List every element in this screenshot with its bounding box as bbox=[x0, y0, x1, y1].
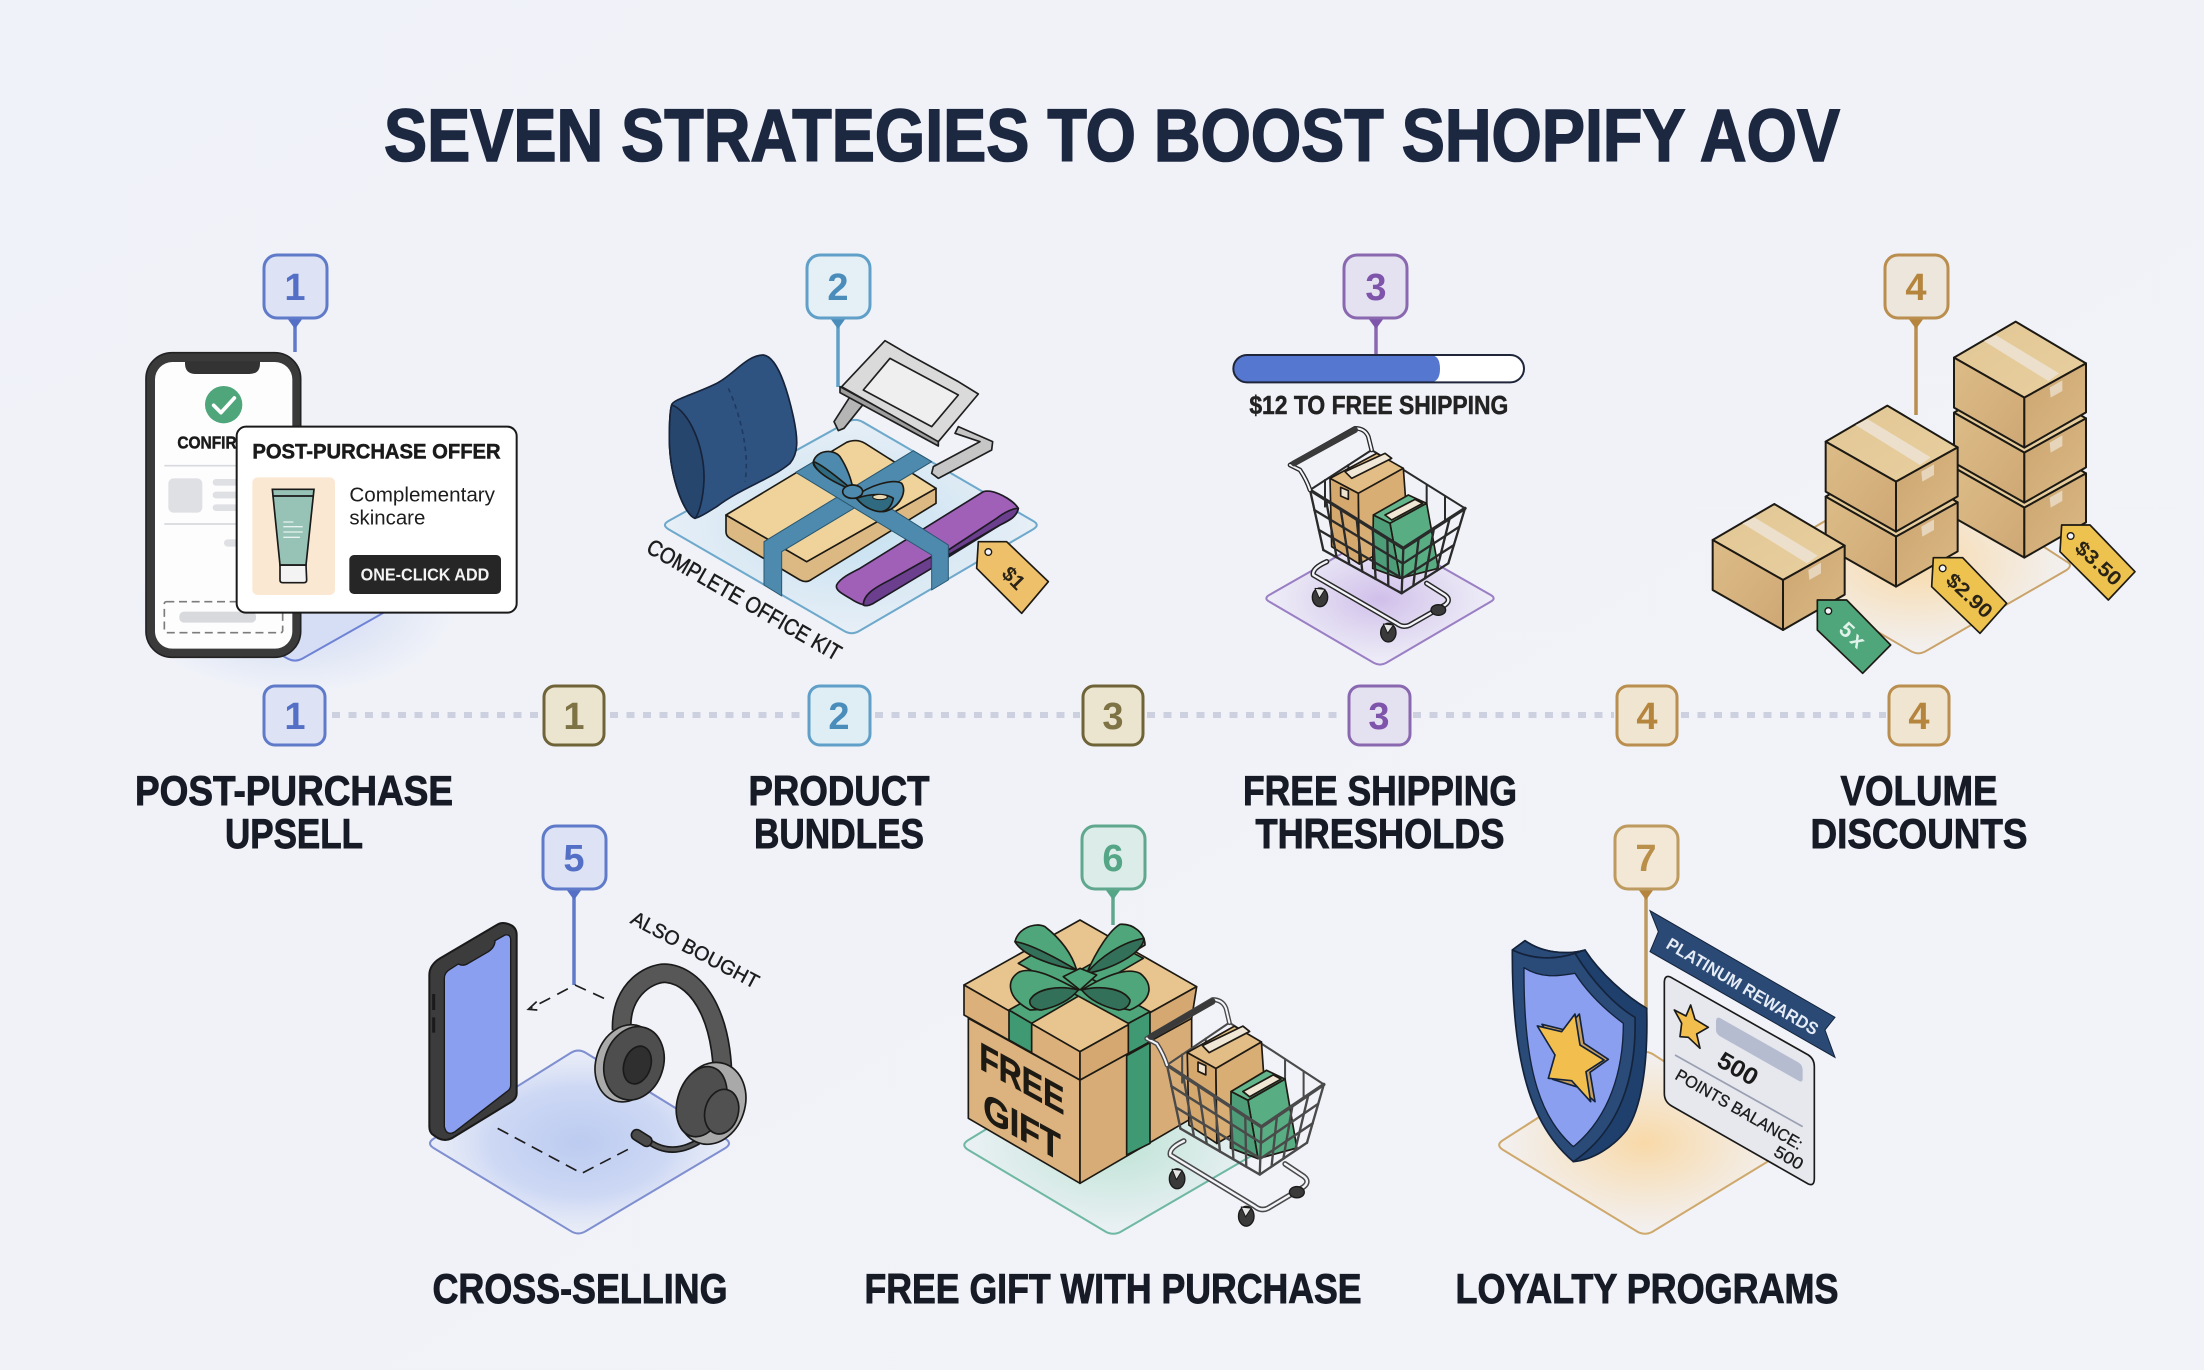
callout badge 6 bbox=[1082, 826, 1145, 925]
timeline badge 3: 3 bbox=[1368, 696, 1390, 738]
timeline badge 2: 2 bbox=[828, 696, 850, 738]
laptop stand bbox=[834, 341, 993, 478]
headset bbox=[585, 973, 756, 1153]
phone and offer popup bbox=[135, 353, 517, 693]
callout badge 5 bbox=[543, 826, 606, 985]
points card: 500 bbox=[1771, 1142, 1807, 1174]
timeline badge 1 bbox=[264, 686, 325, 745]
shipping progress bar and cart bbox=[1233, 355, 1524, 665]
post-purchase offer popup: skincare bbox=[349, 507, 425, 529]
panel: free shipping thresholds illustration bbox=[1233, 255, 1524, 665]
callout badge 1 bbox=[264, 255, 327, 352]
panel: free gift illustration bbox=[964, 826, 1324, 1234]
complete office kit label: COMPLETE OFFICE KIT bbox=[643, 533, 846, 666]
platinum rewards banner: PLATINUM REWARDS bbox=[1663, 934, 1822, 1039]
price tag $1 bbox=[977, 542, 1048, 613]
price tag $3.50 bbox=[2060, 525, 2135, 600]
shipping progress bar and cart: $12 TO FREE SHIPPING bbox=[1249, 390, 1508, 420]
price tag $1: $1 bbox=[997, 562, 1029, 595]
progress bar bbox=[1233, 355, 1524, 382]
timeline badge 1: 1 bbox=[284, 696, 306, 738]
price tag $2.90: $2.90 bbox=[1941, 569, 1996, 623]
single box bbox=[1713, 504, 1845, 630]
heading: cross-selling: CROSS-SELLING bbox=[432, 1265, 728, 1312]
timeline badge 3 bbox=[1349, 686, 1410, 745]
heading: free shipping thresholds: FREE SHIPPING bbox=[1243, 767, 1517, 814]
heading: loyalty programs: LOYALTY PROGRAMS bbox=[1456, 1265, 1838, 1312]
points card: 500 bbox=[1712, 1047, 1763, 1092]
heading: product bundles: BUNDLES bbox=[754, 810, 924, 857]
timeline connector badge 3: 3 bbox=[1102, 696, 1124, 738]
free gift lettering bbox=[979, 1033, 1064, 1172]
resistance band bbox=[836, 491, 1018, 606]
callout badge 2: 2 bbox=[827, 267, 849, 309]
points card: POINTS BALANCE: bbox=[1672, 1065, 1806, 1154]
tag 5x bbox=[1817, 600, 1891, 673]
timeline badge 4 bbox=[1889, 686, 1949, 745]
shopping cart bbox=[1290, 428, 1465, 642]
timeline connector badge 1 bbox=[544, 686, 604, 745]
price tag $3.50: $3.50 bbox=[2070, 537, 2125, 591]
post-purchase offer popup bbox=[237, 427, 517, 613]
stack of two boxes bbox=[1826, 406, 1958, 587]
title: SEVEN STRATEGIES TO BOOST SHOPIFY AOV bbox=[384, 94, 1840, 177]
callout badge 1: 1 bbox=[284, 267, 306, 309]
callout badge 4 bbox=[1885, 255, 1948, 415]
points card bbox=[1664, 976, 1814, 1185]
timeline connector badge 1: 1 bbox=[563, 696, 585, 738]
gift box and cart bbox=[964, 920, 1324, 1234]
post-purchase offer popup: Complementary bbox=[349, 485, 495, 507]
heading: volume discounts bbox=[1810, 767, 2028, 857]
panel: loyalty programs illustration bbox=[1499, 826, 1835, 1234]
panel: post-purchase upsell illustration bbox=[135, 255, 517, 693]
stack of three boxes bbox=[1954, 322, 2086, 558]
timeline badge 2 bbox=[809, 686, 870, 745]
callout badge 2 bbox=[807, 255, 870, 387]
heading: product bundles: PRODUCT bbox=[748, 767, 930, 814]
panel: product bundles illustration bbox=[643, 255, 1048, 666]
callout badge 6: 6 bbox=[1102, 838, 1124, 880]
free gift lettering: GIFT bbox=[983, 1083, 1061, 1170]
price tag $2.90 bbox=[1932, 558, 2007, 633]
tag 5x: 5x bbox=[1834, 617, 1873, 656]
callout badge 4: 4 bbox=[1905, 267, 1927, 309]
shield and rewards card bbox=[1499, 911, 1835, 1234]
shopping cart bbox=[1147, 1000, 1324, 1226]
heading: free gift with purchase: FREE GIFT WITH PURCHASE bbox=[864, 1265, 1362, 1312]
phone: CONFIR bbox=[177, 432, 237, 452]
heading: volume discounts: VOLUME bbox=[1840, 767, 1998, 814]
heading: post-purchase upsell: UPSELL bbox=[225, 810, 363, 857]
free gift lettering: FREE bbox=[979, 1033, 1064, 1123]
stacked boxes and tags bbox=[1713, 322, 2135, 673]
post-purchase offer popup: POST-PURCHASE OFFER bbox=[252, 438, 501, 463]
bundle kit bbox=[643, 341, 1048, 666]
phone bbox=[429, 923, 517, 1140]
gift box with ribbon bbox=[726, 441, 948, 596]
heading: product bundles bbox=[748, 767, 930, 857]
post-purchase offer popup: ONE-CLICK ADD bbox=[361, 565, 489, 585]
platinum rewards banner bbox=[1650, 911, 1835, 1057]
heading: post-purchase upsell bbox=[135, 767, 453, 857]
timeline connector badge 4 bbox=[1617, 686, 1677, 745]
callout badge 7 bbox=[1615, 826, 1678, 1010]
callout badge 5: 5 bbox=[563, 838, 585, 880]
timeline badge 4: 4 bbox=[1908, 696, 1930, 738]
timeline with numbered badges bbox=[264, 686, 1949, 745]
dashed arrows bbox=[498, 985, 631, 1173]
panel: cross-selling illustration bbox=[429, 826, 762, 1233]
callout badge 7: 7 bbox=[1635, 838, 1657, 880]
gift box bbox=[964, 920, 1197, 1183]
callout badge 3 bbox=[1344, 255, 1407, 354]
heading: free shipping thresholds bbox=[1243, 767, 1517, 857]
heading: post-purchase upsell: POST-PURCHASE bbox=[135, 767, 453, 814]
phone and headset bbox=[429, 908, 762, 1233]
lumbar pillow bbox=[669, 355, 797, 518]
shield bbox=[1512, 941, 1647, 1162]
callout badge 3: 3 bbox=[1365, 267, 1387, 309]
heading: volume discounts: DISCOUNTS bbox=[1810, 810, 2028, 857]
timeline connector badge 3 bbox=[1083, 686, 1143, 745]
phone bbox=[146, 353, 301, 657]
panel: volume discounts illustration bbox=[1713, 255, 2135, 673]
heading: free shipping thresholds: THRESHOLDS bbox=[1256, 810, 1504, 857]
timeline connector badge 4: 4 bbox=[1636, 696, 1658, 738]
also bought label: ALSO BOUGHT bbox=[627, 908, 762, 994]
